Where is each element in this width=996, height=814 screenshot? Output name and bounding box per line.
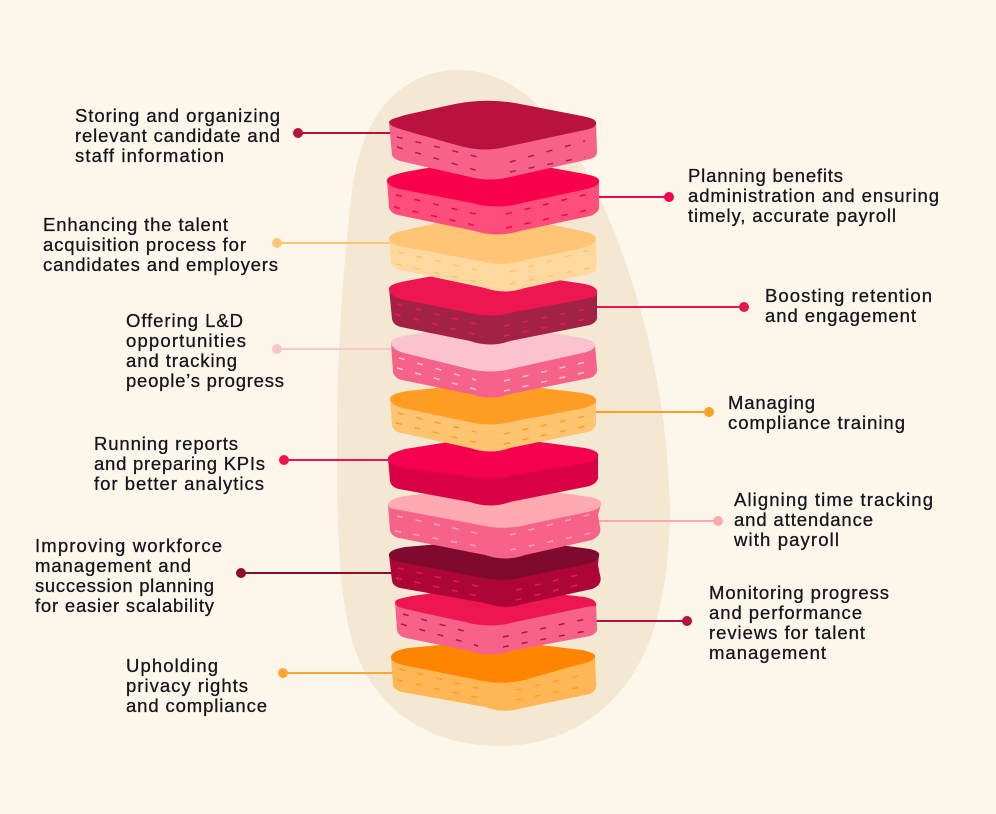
text: reports and KPIs: for better analytics <box>94 473 264 494</box>
text: reports and KPIs: and preparing KPIs <box>94 453 265 474</box>
layer 3: talent acquisition <box>389 216 597 292</box>
text: compliance training <box>728 392 905 433</box>
text: benefits and payroll: administration and ensuring <box>688 185 939 206</box>
connector: privacy <box>278 668 394 678</box>
text: workforce management: for easier scalability <box>35 595 215 616</box>
background blob <box>337 70 670 746</box>
connector: talent acquisition <box>272 238 392 248</box>
layer 6: compliance training <box>390 384 596 452</box>
text: learning and development: and tracking <box>126 350 237 371</box>
text: benefits and payroll: Planning benefits <box>688 165 843 186</box>
text: talent acquisition: Enhancing the talent <box>43 214 228 235</box>
text: talent acquisition: candidates and employers <box>43 254 278 275</box>
text: compliance training: Managing <box>728 392 815 413</box>
text: time tracking: with payroll <box>733 529 839 550</box>
text: storing information: staff information <box>75 145 224 166</box>
connector: reports and KPIs <box>279 455 392 465</box>
text: learning and development: Offering L&D <box>126 310 243 331</box>
connector: learning and development <box>272 344 394 354</box>
connector: retention <box>595 302 749 312</box>
layer 4: retention <box>389 271 597 344</box>
text: benefits and payroll <box>688 165 939 226</box>
text: performance: management <box>709 642 826 663</box>
connector: performance <box>594 616 692 626</box>
text: privacy <box>126 655 267 716</box>
text: learning and development <box>126 310 284 391</box>
text: workforce management: succession planning <box>35 575 214 596</box>
text: performance: Monitoring progress <box>709 582 889 603</box>
layer 8: time tracking <box>388 488 601 558</box>
text: time tracking <box>733 489 933 550</box>
text: storing information <box>75 105 280 166</box>
layer 5: learning and development <box>391 325 597 398</box>
text: workforce management: management and <box>35 555 191 576</box>
layer 10: performance <box>395 590 597 654</box>
text: time tracking: Aligning time tracking <box>734 489 933 510</box>
text: reports and KPIs <box>94 433 265 494</box>
connector: benefits and payroll <box>596 192 674 202</box>
text: retention: and engagement <box>765 305 916 326</box>
text: workforce management <box>35 535 222 616</box>
connector: compliance training <box>593 407 714 417</box>
text: benefits and payroll: timely, accurate payroll <box>688 205 896 226</box>
layer 9: workforce management <box>389 542 601 607</box>
text: retention <box>765 285 932 326</box>
text: privacy: Upholding <box>126 655 218 676</box>
text: time tracking: and attendance <box>734 509 873 530</box>
text: storing information: Storing and organizing <box>75 105 280 126</box>
text: performance <box>709 582 889 663</box>
text: performance: reviews for talent <box>709 622 865 643</box>
layer 11: privacy <box>391 643 596 711</box>
text: learning and development: people’s progress <box>126 370 284 391</box>
connector: workforce management <box>236 568 393 578</box>
text: storing information: relevant candidate and <box>75 125 280 146</box>
text: learning and development: opportunities <box>126 330 246 351</box>
text: performance: and performance <box>709 602 862 623</box>
layer 2: benefits and payroll <box>387 160 599 234</box>
connector: time tracking <box>598 516 723 526</box>
layer 1: storing information <box>389 101 597 180</box>
text: retention: Boosting retention <box>765 285 932 306</box>
text: privacy: privacy rights <box>126 675 248 696</box>
text: compliance training: compliance training <box>728 412 905 433</box>
connector: storing information <box>293 128 392 138</box>
text: reports and KPIs: Running reports <box>94 433 238 454</box>
text: talent acquisition: acquisition process for <box>43 234 246 255</box>
text: workforce management: Improving workforce <box>35 535 222 556</box>
text: talent acquisition <box>43 214 278 275</box>
layer 7: reports and KPIs <box>388 438 598 506</box>
text: privacy: and compliance <box>126 695 267 716</box>
